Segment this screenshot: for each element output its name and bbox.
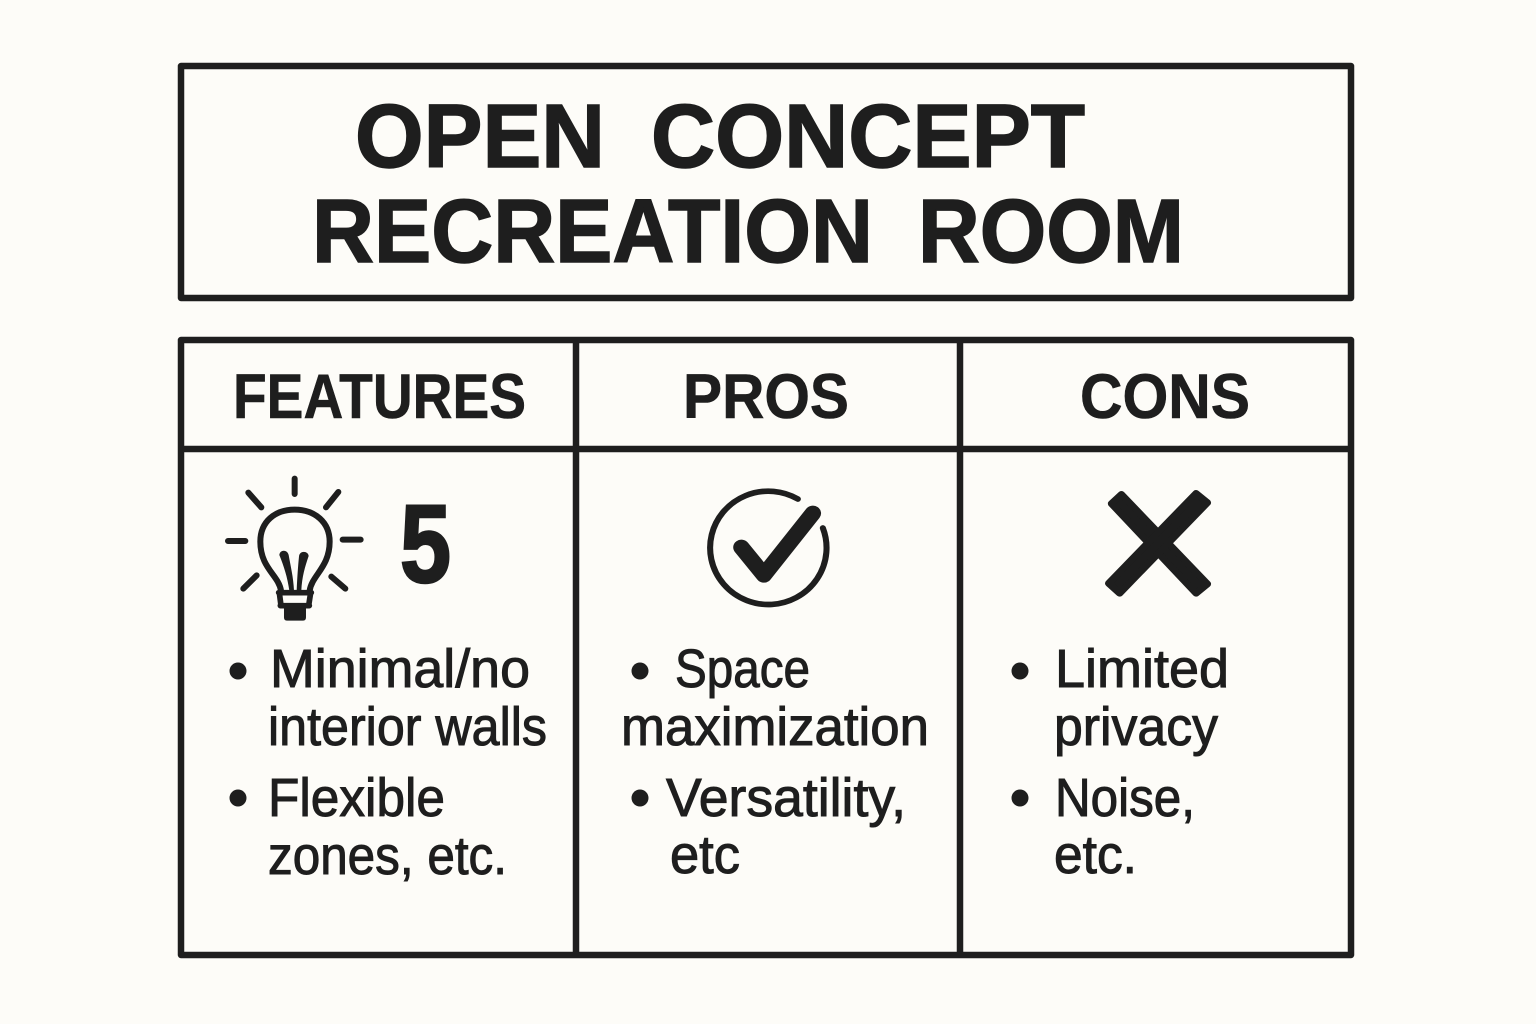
title text: OPEN [355,87,605,187]
pros list: Space [675,639,810,699]
pros list [621,639,929,885]
cons list: Noise, [1055,768,1195,828]
icon: cross [1109,493,1207,593]
cons list: privacy [1054,697,1218,757]
title text: CONCEPT [651,87,1085,187]
comparison table [181,340,1351,955]
feature list: interior walls [268,697,547,757]
cons list: etc. [1054,825,1137,885]
panel: cons [960,340,1351,955]
title text [312,87,1184,282]
title banner [181,66,1351,298]
cons list [1012,639,1229,885]
title text: ROOM [918,182,1184,282]
title text: RECREATION [312,182,873,282]
feature list: Minimal/no [270,639,530,699]
heading: pros: PROS [683,362,849,432]
feature list: Flexible [268,768,445,828]
pros list: Versatility, [666,768,906,828]
feature list: zones, etc. [268,826,507,886]
icon: light bulb [228,479,361,621]
panel: pros [576,340,960,955]
icon: check mark in circle [710,491,827,604]
panel: features [181,340,576,955]
pros list: maximization [621,697,929,757]
cons list: Limited [1055,639,1229,699]
number: 5: 5 [400,483,451,606]
heading: cons: CONS [1080,362,1250,432]
heading: features: FEATURES [233,362,526,432]
feature list [230,639,547,886]
pros list: etc [670,825,740,885]
